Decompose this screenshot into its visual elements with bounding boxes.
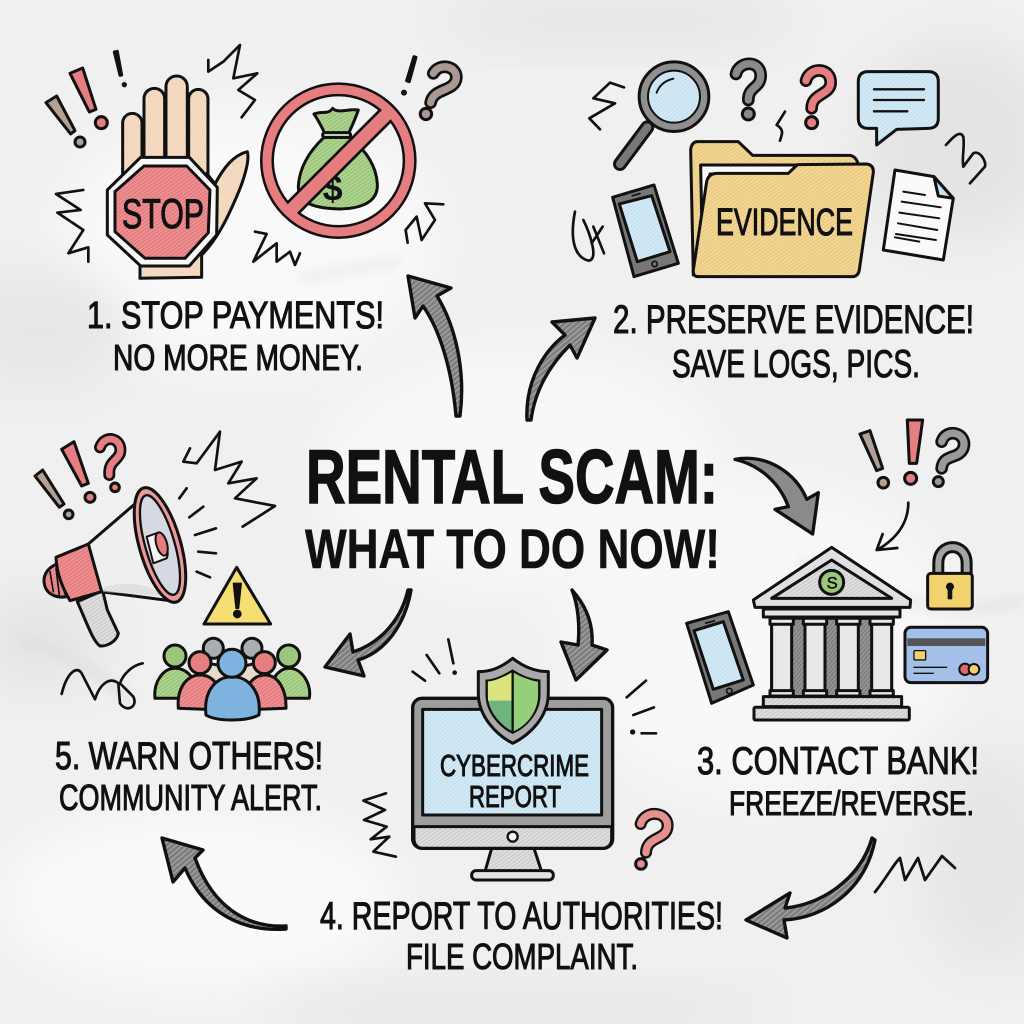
arrow: step 3 to step 4	[746, 838, 875, 938]
icons: magnifier, question marks, folder, phone, document, bubble	[573, 62, 985, 277]
panel: step 3 contact bank	[687, 420, 988, 892]
label: file complaint: FILE COMPLAINT.	[406, 936, 638, 977]
label: 1. stop payments: 1. STOP PAYMENTS!	[87, 295, 384, 337]
label: report on screen: REPORT	[469, 779, 561, 814]
doodle: squiggle near bank step	[875, 856, 955, 892]
arrow: center to step 5	[325, 590, 411, 676]
label: 5. warn others: 5. WARN OTHERS!	[55, 735, 323, 778]
title: RENTAL SCAM:	[306, 435, 718, 520]
label: cybercrime on screen: CYBERCRIME	[440, 748, 589, 783]
label: save logs, pics: SAVE LOGS, PICS.	[672, 343, 920, 386]
icons: monitor with shield and doodles	[363, 639, 668, 880]
arrow: center to step 4	[561, 590, 607, 680]
panel: step 4 report to authorities	[320, 639, 723, 977]
label: community alert: COMMUNITY ALERT.	[59, 777, 322, 818]
label: 4. report to authorities: 4. REPORT TO AUTHORITIES!	[320, 895, 723, 938]
label: no more money: NO MORE MONEY.	[113, 337, 363, 378]
title: WHAT TO DO NOW!	[305, 517, 720, 580]
icons: megaphone, warning triangle, crowd	[35, 432, 310, 720]
icons: hand with stop sign, barred money bag, doodles: $	[323, 168, 343, 209]
title	[305, 435, 720, 580]
arrow: center to step 2	[527, 318, 595, 420]
label: evidence on folder: EVIDENCE	[716, 202, 853, 244]
arrow: step 4 to step 5	[162, 838, 286, 929]
icons: hand with stop sign, barred money bag, doodles	[46, 45, 456, 278]
icons: bank, lock, card, phone, marks: S	[827, 573, 838, 592]
panel: step 2 preserve evidence	[573, 62, 985, 386]
arrow: center to step 1	[408, 276, 462, 416]
panel: step 1 stop payments	[46, 45, 456, 378]
label: stop sign word: STOP	[122, 190, 204, 237]
icons: bank, lock, card, phone, marks	[687, 420, 988, 720]
panel: step 5 warn others	[35, 432, 323, 818]
